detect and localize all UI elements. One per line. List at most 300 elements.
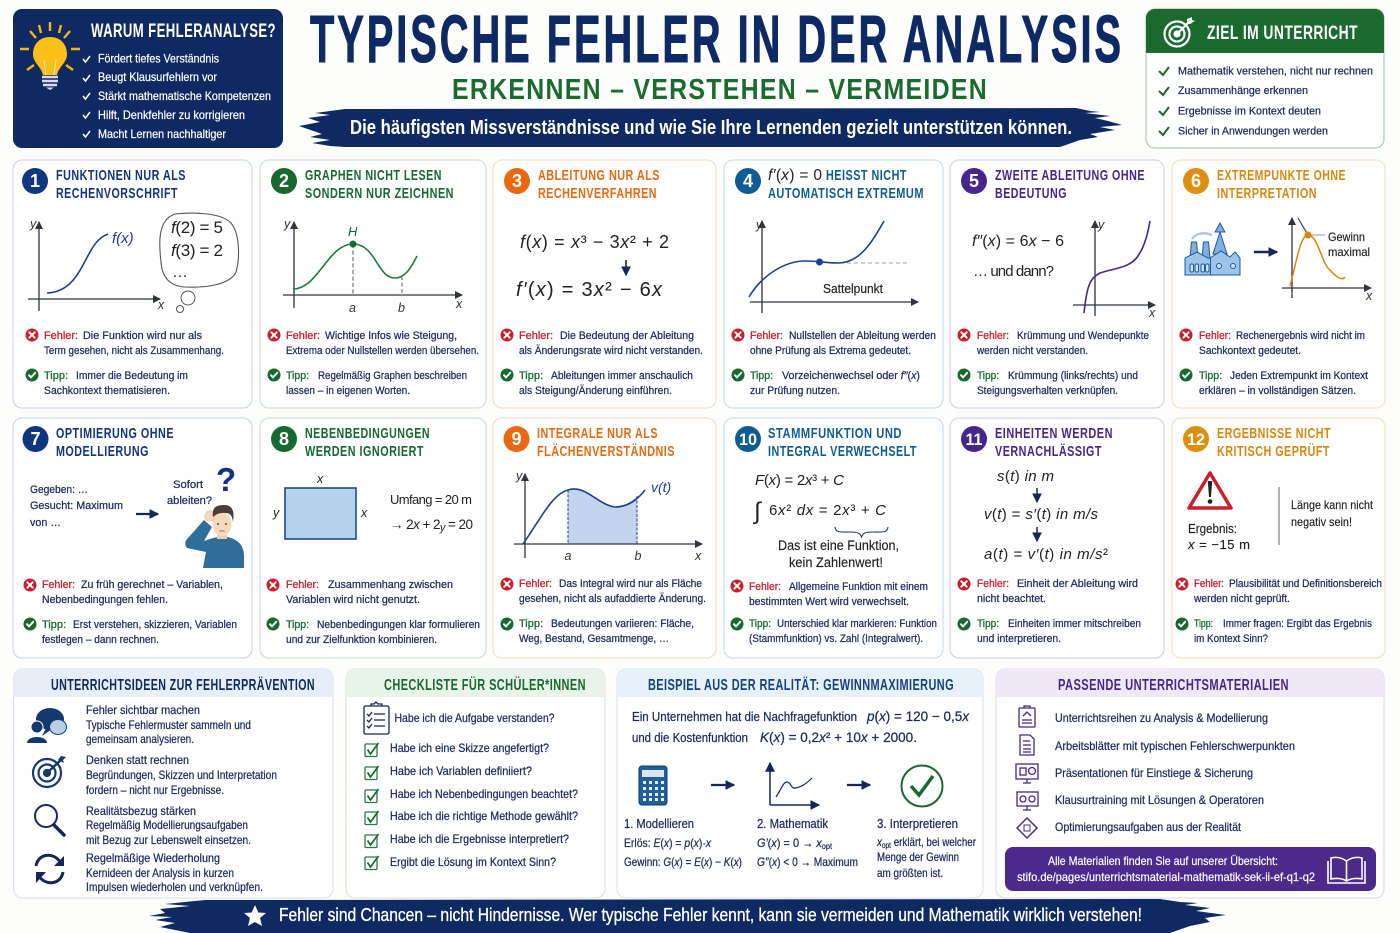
hinweis: Länge kann nicht (1291, 498, 1374, 512)
number badge: 4 (743, 171, 753, 191)
list: gründe: Fördert tiefes Verständnis (98, 52, 219, 66)
diagram: rectangle: x (316, 472, 324, 486)
ergebnis: x = −15 m (1187, 537, 1250, 552)
icon: training (1017, 792, 1038, 810)
formula: Umfang = 20 m (390, 492, 472, 507)
fehler: gesehen, nicht als aufaddierte Änderung. (519, 593, 706, 605)
chart: f(x) (28, 217, 165, 312)
formula: … und dann? (973, 263, 1054, 280)
panel: card 12 (1172, 418, 1385, 658)
icon: magnifier (35, 805, 64, 835)
diagram: rectangle: x (360, 506, 368, 520)
link box: Alle Materialien finden Sie auf unserer Übersicht: (1048, 854, 1278, 868)
heading: FUNKTIONEN NUR ALS (56, 167, 186, 184)
link box: stifo.de/pages/unterrichtsmaterial-mathematik-sek-ii-ef-q1-q2 (1017, 870, 1315, 884)
tipp: lassen – in eigenen Worten. (286, 385, 410, 397)
checklist: Habe ich Nebenbedingungen beachtet? (390, 787, 578, 801)
fehler: Fehler: (286, 579, 319, 591)
heading: ABLEITUNG NUR ALS (538, 167, 660, 184)
arrow (136, 513, 158, 515)
arrow (847, 784, 870, 786)
heading: BEISPIEL AUS DER REALITÄT: GEWINNMAXIMIERUNG (648, 676, 954, 694)
formula (972, 233, 1064, 280)
speech: Sofort (173, 479, 203, 491)
arrow (711, 784, 734, 786)
step 3: opt (882, 841, 892, 850)
list: ziele: Zusammenhänge erkennen (1178, 85, 1308, 97)
formula: → 2x + 2 (390, 517, 440, 532)
idea 2: Denken statt rechnen (86, 753, 189, 767)
fehler: bestimmten Wert wird verwechselt. (749, 596, 909, 608)
number badge: 5 (969, 171, 979, 191)
number badge (271, 168, 297, 194)
number badge: 2 (279, 171, 289, 191)
formula: 6x² dx = 2x³ + C (769, 502, 886, 519)
heading (995, 167, 1145, 202)
fehler: Fehler: (749, 581, 781, 593)
formula (390, 492, 473, 534)
heading: NEBENBEDINGUNGEN (305, 425, 430, 442)
fehler (1180, 328, 1365, 357)
fehler: nicht beachtet. (977, 593, 1046, 605)
list: gründe: Macht Lernen nachhaltiger (98, 127, 226, 141)
number badge: 10 (739, 430, 757, 449)
panel: card 9 (493, 418, 716, 658)
tipp: Tipp: (42, 619, 66, 631)
fehler: werden nicht verstanden. (976, 345, 1088, 357)
panel: card 7 (13, 418, 252, 658)
number badge (271, 426, 297, 452)
chart: integral: b (634, 549, 642, 563)
item 1: Unterrichtsreihen zu Analysis & Modellierung (1055, 711, 1268, 725)
ergebnis: Ergebnis: (1188, 521, 1237, 536)
fehler: Einheit der Ableitung wird (1017, 578, 1138, 590)
list: ziele: Sicher in Anwendungen werden (1178, 126, 1328, 138)
icon: worksheet (1020, 735, 1034, 755)
tipp: erklären – in vollständigen Sätzen. (1199, 385, 1356, 397)
number badge: 7 (30, 429, 41, 449)
step 3: x (876, 835, 883, 849)
tipp: Vorzeichenwechsel oder f″(x) (782, 370, 920, 382)
step 2: 2. Mathematik (757, 816, 828, 831)
idea 4: Kernideen der Analysis in kurzen (86, 866, 234, 880)
fehler (958, 578, 1138, 605)
fehler: ohne Prüfung als Extrema gedeutet. (750, 345, 911, 357)
list: ziele (1159, 66, 1373, 138)
icon: checkmark circle (902, 766, 942, 806)
chart: f(x): y (29, 217, 37, 231)
heading: SONDERN NUR ZEICHNEN (305, 185, 454, 202)
list: gründe: Stärkt mathematische Kompetenzen (98, 89, 271, 103)
number badge: 11 (966, 430, 982, 449)
idea 4: Regelmäßige Wiederholung (86, 851, 220, 865)
speech: ableiten? (167, 495, 212, 507)
formula: y (439, 522, 447, 534)
heading (995, 425, 1113, 460)
icon: warning triangle (1189, 473, 1231, 508)
fehler: Krümmung und Wendepunkte (1017, 330, 1149, 342)
formula: f(x) = x³ − 3x² + 2 (520, 232, 669, 252)
tipp: Erst verstehen, skizzieren, Variablen (73, 619, 237, 631)
tipp (1180, 368, 1368, 397)
tipp: Tipp: (519, 370, 543, 382)
subtitle: ERKENNEN – VERSTEHEN – VERMEIDEN (452, 74, 988, 106)
fehler: Allgemeine Funktion mit einem (789, 581, 928, 593)
heading: HEISST NICHT (826, 167, 907, 184)
heading: STAMMFUNKTION UND (768, 425, 902, 442)
fehler: Extrema oder Nullstellen werden übersehen. (286, 345, 479, 357)
tipp: als Steigung/Änderung einführen. (519, 385, 672, 397)
heading: EXTREMPUNKTE OHNE (1217, 167, 1346, 184)
list: ziele: Ergebnisse im Kontext deuten (1178, 106, 1321, 118)
step 1: Erlös: E(x) = p(x)·x (624, 836, 712, 850)
panel: card 2 (260, 160, 486, 408)
thought bubble: … (172, 264, 188, 281)
step 2 (757, 816, 858, 869)
tipp: Steigungsverhalten verknüpfen. (977, 385, 1118, 397)
icon: optimization (1017, 818, 1037, 838)
step 2: G″(x) < 0 → Maximum (757, 855, 858, 869)
number badge: 8 (279, 429, 289, 449)
chart: graph with high point: H (348, 224, 358, 239)
fehler: Fehler: (750, 330, 783, 342)
tipp: Immer fragen: Ergibt das Ergebnis (1223, 618, 1372, 630)
heading: INTEGRALE NUR ALS (537, 425, 658, 442)
hinweis: negativ sein! (1291, 515, 1352, 529)
tipp: Jeden Extrempunkt im Kontext (1230, 370, 1368, 382)
step 1: 1. Modellieren (624, 816, 694, 831)
chart: f(x): x (157, 298, 165, 312)
fehler: Die Funktion wird nur als (83, 330, 202, 342)
formula (752, 472, 899, 570)
tipp: Tipp: (519, 618, 543, 630)
heading: PASSENDE UNTERRICHTSMATERIALIEN (1058, 677, 1289, 694)
tipp (24, 618, 237, 646)
icon: mini chart (770, 763, 819, 805)
panel: card 6 (1172, 160, 1385, 408)
tipp: Weg, Bestand, Gesamtmenge, … (519, 633, 669, 645)
aufgabe: Ein Unternehmen hat die Nachfragefunktion (632, 709, 857, 724)
tipp (732, 368, 920, 397)
formula: f″(x) = 6x − 6 (972, 233, 1064, 250)
heading: BEDEUTUNG (995, 185, 1067, 202)
formula (516, 232, 669, 301)
heading: EINHEITEN WERDEN (995, 425, 1113, 442)
step 3 (876, 816, 976, 880)
tipp: Ableitungen immer anschaulich (551, 370, 693, 382)
heading: ERGEBNISSE NICHT (1217, 425, 1331, 442)
fehler: Sachkontext gedeutet. (1199, 345, 1301, 357)
heading: MODELLIERUNG (56, 443, 149, 460)
heading (537, 425, 675, 460)
speech: ? (216, 461, 236, 498)
heading: AUTOMATISCH EXTREMUM (768, 185, 924, 202)
icon: calculator (639, 766, 667, 805)
fehler: Fehler: (977, 330, 1009, 342)
number badge: 1 (30, 171, 40, 191)
tipp (268, 368, 467, 397)
aufgabentext: Gesucht: Maximum (30, 500, 123, 512)
panel: ziel im unterricht (1146, 9, 1384, 148)
thought bubble (160, 213, 238, 312)
heading: INTEGRAL VERWECHSELT (768, 443, 917, 460)
tipp: Tipp: (286, 619, 309, 631)
tipp: festlegen – dann rechnen. (42, 634, 159, 646)
tipp: Krümmung (links/rechts) und (1008, 370, 1138, 382)
panel: card 10 (724, 418, 943, 658)
tipp: Nebenbedingungen klar formulieren (317, 619, 480, 631)
chart: graph with high point: x (455, 297, 463, 311)
fehler: Nullstellen der Ableitung werden (789, 330, 936, 342)
aufgabe: und die Kostenfunktion (632, 730, 748, 745)
checklist: Habe ich die Aufgabe verstanden? (394, 711, 555, 725)
checklist: Ergibt die Lösung im Kontext Sinn? (390, 855, 556, 869)
thought bubble: f(3) = 2 (171, 241, 223, 260)
arrow (1254, 251, 1277, 253)
heading (1217, 425, 1331, 460)
number badge (504, 168, 530, 194)
aufgabe: p(x) = 120 − 0,5x (866, 708, 970, 724)
panel: card 4 (724, 160, 943, 408)
icon: presentation (1016, 764, 1038, 783)
fehler: Variablen wird nicht genutzt. (286, 594, 420, 606)
tipp: Tipp: (977, 618, 999, 630)
item 3: Präsentationen für Einstiege & Sicherung (1055, 766, 1253, 780)
list: gründe: Beugt Klausurfehlern vor (98, 70, 217, 84)
heading: WERDEN IGNORIERT (305, 443, 424, 460)
fehler (958, 328, 1149, 357)
panel: card 1 (13, 160, 252, 408)
heading: FLÄCHENVERSTÄNDNIS (537, 443, 675, 460)
idea 1 (86, 703, 251, 746)
icon: clipboard (364, 702, 389, 734)
fehler (732, 328, 936, 357)
fehler (730, 580, 928, 608)
heading: VERNACHLÄSSIGT (995, 443, 1102, 460)
tipp (26, 368, 188, 397)
heading: UNTERRICHTSIDEEN ZUR FEHLERPRÄVENTION (51, 676, 315, 694)
checklist: Habe ich eine Skizze angefertigt? (390, 741, 549, 755)
fehler (24, 578, 223, 606)
panel: card 5 (950, 160, 1164, 408)
fehler (26, 328, 224, 357)
idea 2: Begründungen, Skizzen und Interpretation (86, 768, 277, 782)
tipp: Tipp: (286, 370, 309, 382)
fehler (268, 328, 479, 357)
heading (768, 167, 924, 202)
chart: graph with high point: a (349, 301, 356, 315)
panel: card 3 (493, 160, 716, 408)
tipp: Einheiten immer mitschreiben (1008, 618, 1141, 630)
heading: ZWEITE ABLEITUNG OHNE (995, 167, 1145, 184)
number badge (22, 168, 48, 194)
heading (56, 167, 186, 202)
number badge: 9 (511, 429, 522, 449)
heading: KRITISCH GEPRÜFT (1217, 443, 1330, 460)
chart: sattelpunkt (749, 218, 918, 313)
icon: target (1164, 17, 1195, 46)
idea 1: gemeinsam analysieren. (86, 732, 194, 746)
idea 3 (86, 804, 251, 847)
fehler: Fehler: (42, 579, 75, 591)
heading (768, 425, 917, 460)
number badge (504, 426, 530, 452)
chart: graph with high point (283, 217, 463, 315)
fehler: als Änderungsrate wird nicht verstanden. (519, 345, 703, 357)
tipp (958, 618, 1141, 645)
list: ziele: Mathematik verstehen, nicht nur rechnen (1178, 66, 1373, 78)
idea 3: mit Bezug zur Lebenswelt einsetzen. (86, 833, 251, 847)
icon: nachdenkliche person (185, 505, 244, 568)
chart: graph with high point: y (283, 217, 291, 231)
aufgabentext (30, 484, 123, 529)
number badge: 3 (512, 171, 522, 191)
diagram: rectangle: y (272, 506, 280, 520)
tipp: Tipp: (977, 370, 999, 382)
formula: F(x) = 2x³ + C (755, 472, 844, 489)
heading: warum fehleranalyse: WARUM FEHLERANALYSE? (91, 21, 276, 42)
heading (1217, 167, 1346, 202)
number badge: 6 (1191, 171, 1201, 191)
tipp: Sachkontext thematisieren. (44, 385, 170, 397)
hinweis (1279, 487, 1374, 545)
number badge (22, 426, 48, 452)
icon: factory (1185, 223, 1240, 275)
panel: unterrichtsmaterialien (996, 669, 1384, 898)
fehler (1176, 578, 1382, 605)
chart: integral: v(t) (651, 479, 671, 495)
tipp: im Kontext Sinn? (1194, 633, 1268, 645)
idea 1: Fehler sichtbar machen (86, 703, 200, 717)
chart: sattelpunkt: Sattelpunkt (823, 282, 884, 296)
footer banner: Fehler sind Chancen – nicht Hindernisse. Wer typische Fehler kennt, kann sie vermeiden und Mathematik wirklich verstehen! (279, 905, 1142, 925)
step 1 (624, 816, 742, 869)
thought bubble: f(2) = 5 (171, 218, 223, 237)
fehler (266, 578, 453, 606)
tipp: Immer die Bedeutung im (76, 370, 188, 382)
fehler: Nebenbedingungen fehlen. (42, 594, 168, 606)
aufgabe (632, 708, 970, 745)
idea 3: Regelmäßig Modellierungsaufgaben (86, 818, 248, 832)
step 3: am größten ist. (877, 866, 943, 880)
chart: integral: x (694, 549, 702, 563)
step 3: 3. Interpretieren (877, 816, 958, 831)
heading: OPTIMIERUNG OHNE (56, 425, 174, 442)
icon: light bulb (20, 22, 80, 90)
tipp (266, 618, 480, 646)
fehler: Term gesehen, nicht als Zusammenhang. (44, 345, 224, 357)
fehler: Das Integral wird nur als Fläche (559, 578, 702, 590)
aufgabentext: von … (30, 517, 61, 529)
fehler: Fehler: (1199, 330, 1231, 342)
chart: kubische funktion: x (1148, 306, 1156, 320)
number badge (735, 426, 761, 452)
heading (56, 425, 174, 460)
tipp: Tipp: (1194, 618, 1213, 630)
aufgabe: K(x) = 0,2x² + 10x + 2000. (760, 729, 917, 745)
link box (1005, 847, 1376, 891)
item 4: Klausurtraining mit Lösungen & Operatoren (1055, 793, 1264, 807)
diagram: rectangle (272, 472, 368, 539)
tipp: (Stammfunktion) vs. Zahl (Integralwert). (749, 633, 923, 645)
formula: kein Zahlenwert! (789, 555, 883, 570)
tipp (500, 368, 693, 397)
icon: clipboard (1019, 706, 1035, 727)
fehler: Rechenergebnis wird nicht im (1236, 330, 1365, 342)
fehler: Fehler: (1194, 578, 1224, 590)
heading: f′(x) = 0 (768, 167, 822, 184)
step 3: Menge der Gewinn (877, 850, 959, 864)
icon: book (1328, 857, 1365, 883)
panel: checkliste (346, 669, 605, 898)
heading: RECHENVERFAHREN (538, 185, 657, 202)
number badge (1183, 426, 1209, 452)
icon: target (33, 756, 66, 787)
checklist: Habe ich Variablen definiiert? (390, 764, 532, 778)
heading: GRAPHEN NICHT LESEN (305, 167, 442, 184)
chart: f(x): f(x) (112, 230, 134, 247)
tipp: Regelmäßig Graphen beschreiben (318, 370, 467, 382)
banner: untertitel: Die häufigsten Missverständnisse und wie Sie Ihre Lernenden gezielt unterstützen können. (350, 117, 1072, 139)
step 3: erklärt, bei welcher (891, 835, 976, 849)
formula chain (984, 468, 1108, 563)
idea 2: fordern – nicht nur Ergebnisse. (86, 783, 224, 797)
tipp: Bedeutungen variieren: Fläche, (551, 618, 694, 630)
chart: gewinn maximal: maximal (1328, 245, 1370, 259)
fehler: Zusammenhang zwischen (328, 579, 453, 591)
fehler (500, 328, 703, 357)
tipp: Tipp: (750, 370, 773, 382)
list: gründe: Hilft, Denkfehler zu korrigieren (98, 108, 245, 122)
fehler: Fehler: (977, 578, 1009, 590)
formula: ∫ (752, 498, 762, 525)
aufgabentext: Gegeben: … (30, 484, 88, 496)
speech (167, 461, 236, 507)
heading (305, 425, 430, 460)
heading (305, 167, 454, 202)
heading: RECHENVORSCHRIFT (56, 185, 178, 202)
panel: unterrichtsideen (14, 669, 333, 898)
checklist (365, 711, 578, 870)
footer banner (149, 899, 1226, 933)
step 2: G′(x) = 0 → x (757, 836, 822, 850)
fehler: Wichtige Infos wie Steigung, (325, 330, 457, 342)
formula: f′(x) = 3x² − 6x (516, 279, 663, 301)
chart: integral: y (515, 469, 523, 483)
number badge: 12 (1187, 430, 1205, 449)
formula chain: v(t) = s′(t) in m/s (984, 506, 1098, 523)
chart: kubische funktion: y (1097, 218, 1105, 232)
step 2: opt (822, 842, 833, 851)
fehler: Plausibilität und Definitionsbereich (1229, 578, 1382, 590)
number badge (1183, 168, 1209, 194)
icon: gespräch (27, 708, 66, 743)
fehler: Fehler: (519, 578, 552, 590)
item 5: Optimierungsaufgaben aus der Realität (1055, 820, 1242, 834)
fehler: Fehler: (286, 330, 320, 342)
fehler: Die Bedeutung der Ableitung (560, 330, 694, 342)
chart: integral: a (564, 549, 572, 563)
idea 4: Impulsen wiederholen und verknüpfen. (86, 880, 263, 894)
panel: card 11 (950, 418, 1164, 658)
number badge (961, 426, 987, 452)
tipp (500, 618, 694, 645)
tipp: und zur Zielfunktion kombinieren. (286, 634, 437, 646)
chart: kubische funktion (1073, 218, 1156, 320)
panel: beispiel gewinnmaximierung (617, 669, 983, 898)
tipp (730, 618, 937, 645)
chart: gewinn maximal: Gewinn (1328, 230, 1365, 244)
